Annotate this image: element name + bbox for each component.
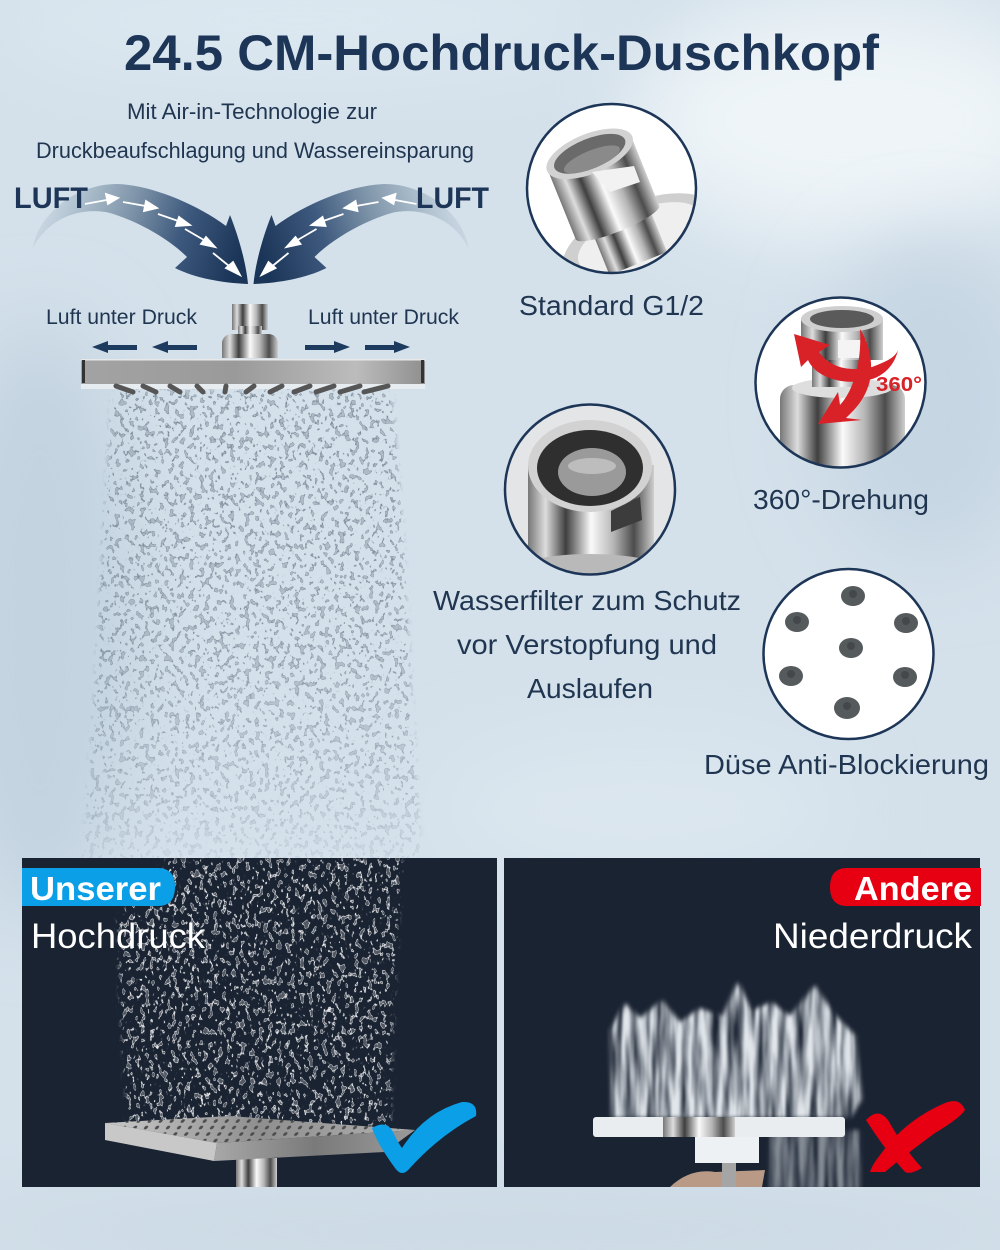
label: Standard G1/2: Standard G1/2 [519,290,704,321]
left air arrow [33,184,248,284]
detail circle: standard G1/2 connector [526,102,698,274]
label: Hochdruck: Hochdruck [31,917,206,956]
label: Niederdruck: Niederdruck [773,917,973,956]
badge: Andere: Andere [854,870,972,907]
label: Luft unter Druck right: Luft unter Druck [308,306,459,329]
label: water filter [433,585,741,704]
low-pressure weak streaks [607,980,865,1187]
panel: others low pressure [504,858,981,1190]
label: water filter: Auslaufen [527,673,653,704]
nozzles [116,386,388,392]
label: LUFT right: LUFT [416,182,489,215]
icon: blue check mark [372,1102,476,1173]
head plate [81,384,425,389]
low-pressure shower head [593,1117,845,1187]
detail circle: water filter [505,404,675,582]
label: water filter: vor Verstopfung und [457,629,717,660]
detail circle: anti-block nozzles [764,569,934,739]
label: Luft unter Druck left: Luft unter Druck [46,306,197,329]
icon: red rotation arrows [794,329,898,424]
pressure arrows [92,341,410,353]
subtitle text [36,99,474,163]
panel: ours high pressure [22,855,497,1188]
spray of water droplets [82,389,422,858]
title: 24.5 CM-Hochdruck-Duschkopf [124,25,879,81]
connector [222,304,278,358]
detail circle: 360 degree rotation [756,298,926,475]
icon: red cross [866,1101,965,1173]
right air arrow [254,184,468,284]
label: 360 degree rotation: 360°-Drehung [753,484,929,515]
shower head [81,304,425,392]
label: LUFT left: LUFT [14,182,88,215]
subtitle text: Mit Air-in-Technologie zur [127,99,377,124]
label: water filter: Wasserfilter zum Schutz [433,585,741,616]
badge: Unserer: Unserer [30,870,161,907]
high-pressure droplets [110,855,410,1140]
shower head from below [105,1116,415,1188]
label: 360 degrees: 360° [876,374,922,396]
label: anti-block nozzles: Düse Anti-Blockierung [704,749,989,780]
subtitle text: Druckbeaufschlagung und Wassereinsparung [36,138,474,163]
